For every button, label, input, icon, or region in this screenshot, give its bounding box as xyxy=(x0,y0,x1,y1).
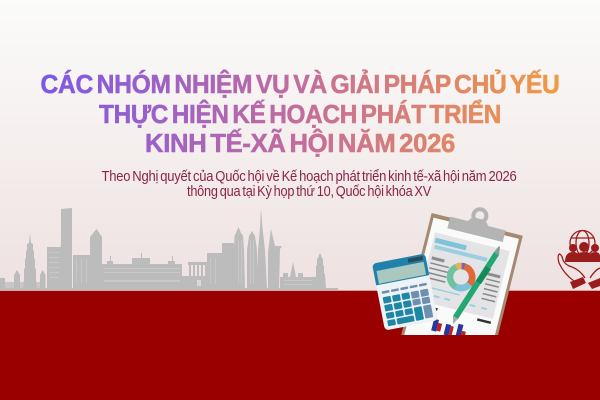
calculator body xyxy=(372,253,438,331)
people xyxy=(565,242,600,262)
skyline windows xyxy=(49,240,312,286)
subtitle: Theo Nghị quyết của Quốc hội về Kế hoạch phát triển kinh tế-xã hội năm 2026 xyxy=(102,169,517,185)
icon: clipboard with report xyxy=(401,207,523,335)
left hand xyxy=(558,254,585,281)
grey report panel xyxy=(427,232,510,319)
subtitle xyxy=(102,169,517,200)
clipboard board xyxy=(401,213,523,335)
title: THỰC HIỆN KẾ HOẠCH PHÁT TRIỂN xyxy=(99,99,501,129)
mini bars xyxy=(436,322,466,335)
icon: hands holding globe and people xyxy=(558,230,600,289)
report lines xyxy=(431,256,445,262)
calculator screen xyxy=(376,262,426,284)
background xyxy=(0,0,600,292)
title: KINH TẾ-XÃ HỘI NĂM 2026 xyxy=(145,128,455,158)
calculator keys xyxy=(381,283,433,326)
skyline xyxy=(0,208,338,291)
globe xyxy=(570,230,595,256)
donut chart xyxy=(448,264,475,290)
title: CÁC NHÓM NHIỆM VỤ VÀ GIẢI PHÁP CHỦ YẾU xyxy=(40,69,560,99)
report header bars xyxy=(435,238,467,250)
paper xyxy=(404,218,519,335)
right hand xyxy=(588,278,600,289)
icon: calculator xyxy=(372,253,438,331)
clip xyxy=(448,216,506,242)
subtitle: thông qua tại Kỳ họp thứ 10, Quốc hội khóa XV xyxy=(187,184,431,200)
red band xyxy=(0,290,600,292)
title xyxy=(40,69,560,158)
icon: green pen xyxy=(453,246,500,324)
